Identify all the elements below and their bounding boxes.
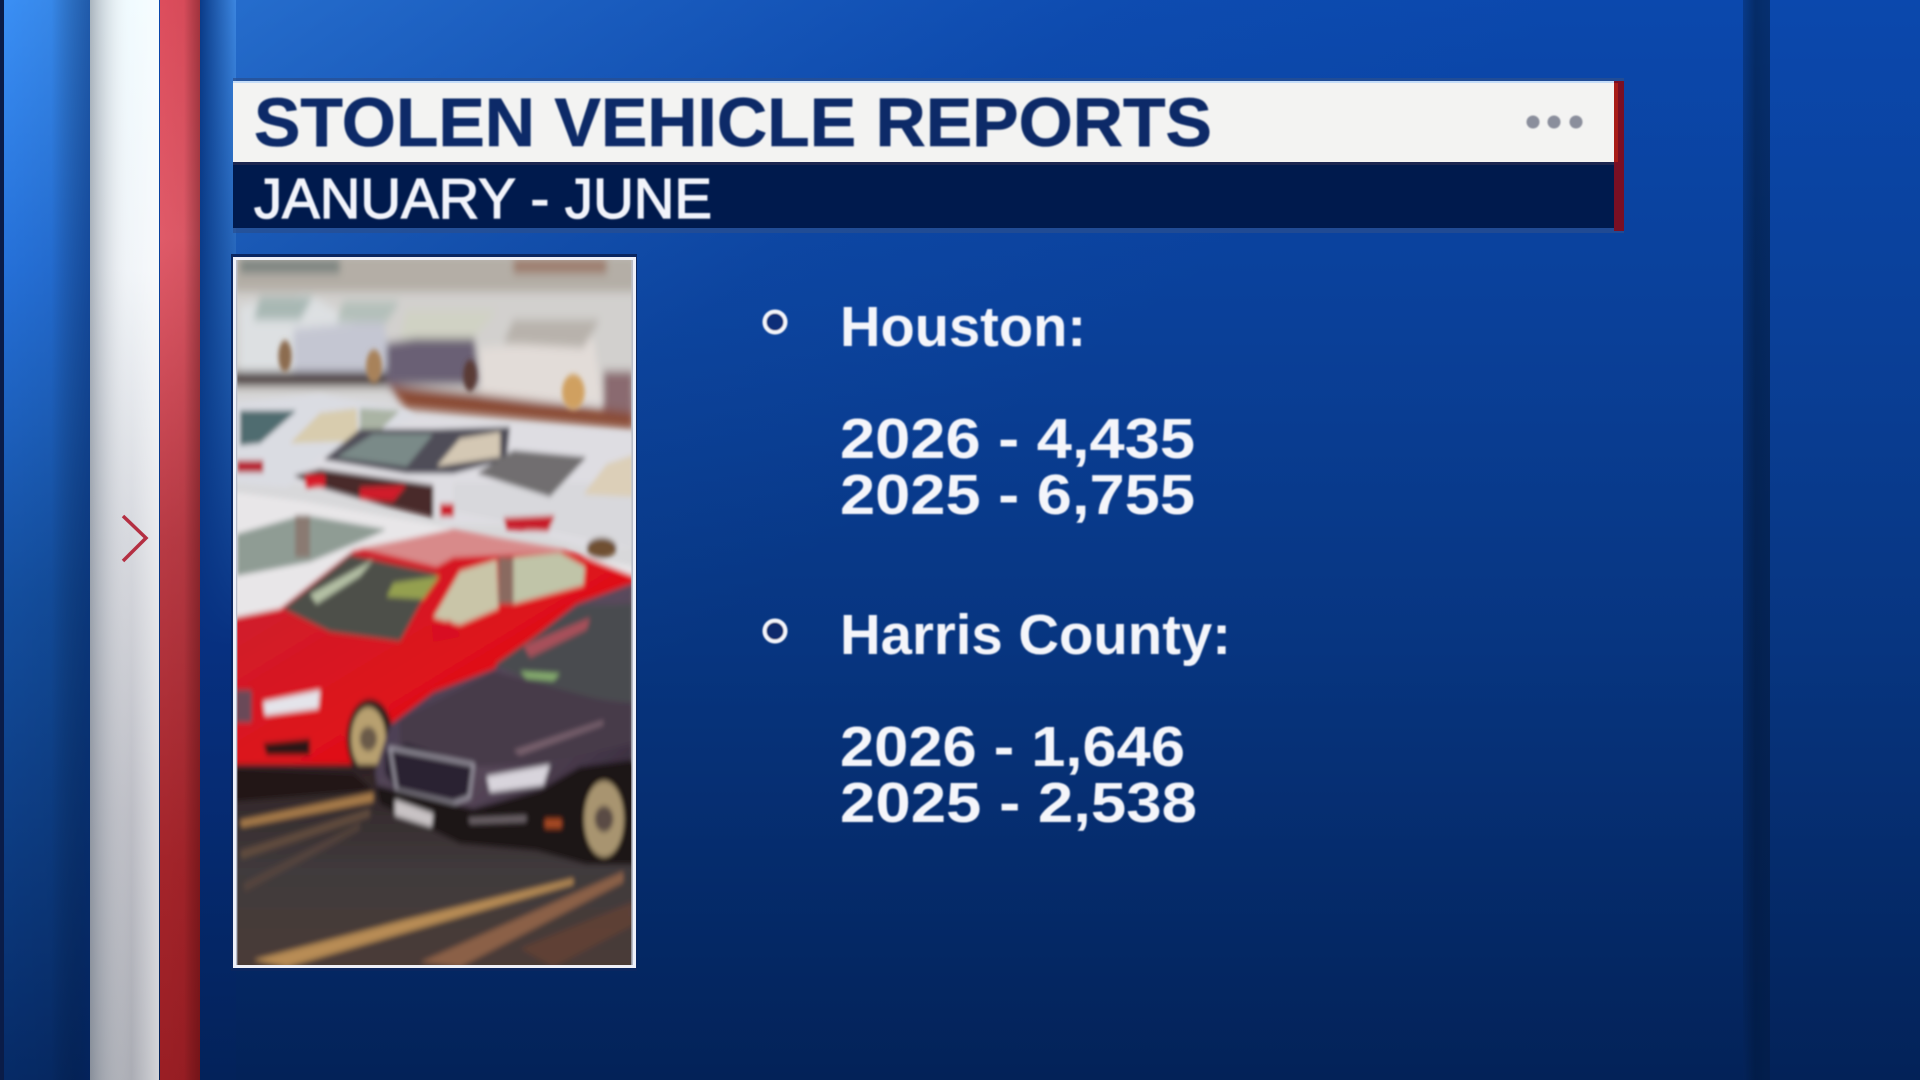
stat: Houston 2025: 2025 - 6,755 [840, 463, 1195, 527]
bullet list: Harris County [764, 603, 1231, 835]
bullet list: Houston [764, 295, 1195, 527]
icon: chevron arrow [123, 516, 146, 561]
heading: date range: JANUARY - JUNE [254, 167, 712, 231]
icon: Houston bullet [764, 312, 786, 332]
label: Houston: Houston: [840, 295, 1086, 359]
heading: main title: STOLEN VEHICLE REPORTS [254, 84, 1212, 161]
photo: parked cars [231, 254, 637, 974]
ground [233, 764, 637, 974]
stat: Houston 2026: 2026 - 4,435 [840, 407, 1195, 471]
stat: Harris County 2026: 2026 - 1,646 [840, 715, 1185, 779]
photo frame [234, 258, 634, 966]
label: Harris County: Harris County: [840, 603, 1231, 667]
icon: Harris County bullet [764, 620, 786, 642]
dark car [373, 580, 632, 812]
stat: Harris County 2025: 2025 - 2,538 [840, 771, 1197, 835]
row 3 car [233, 492, 633, 622]
icon: three dots [1526, 116, 1582, 128]
row 2 cars [233, 394, 420, 487]
title banner [233, 78, 1624, 233]
left decorative stripes [0, 0, 236, 1080]
red car [233, 529, 633, 774]
